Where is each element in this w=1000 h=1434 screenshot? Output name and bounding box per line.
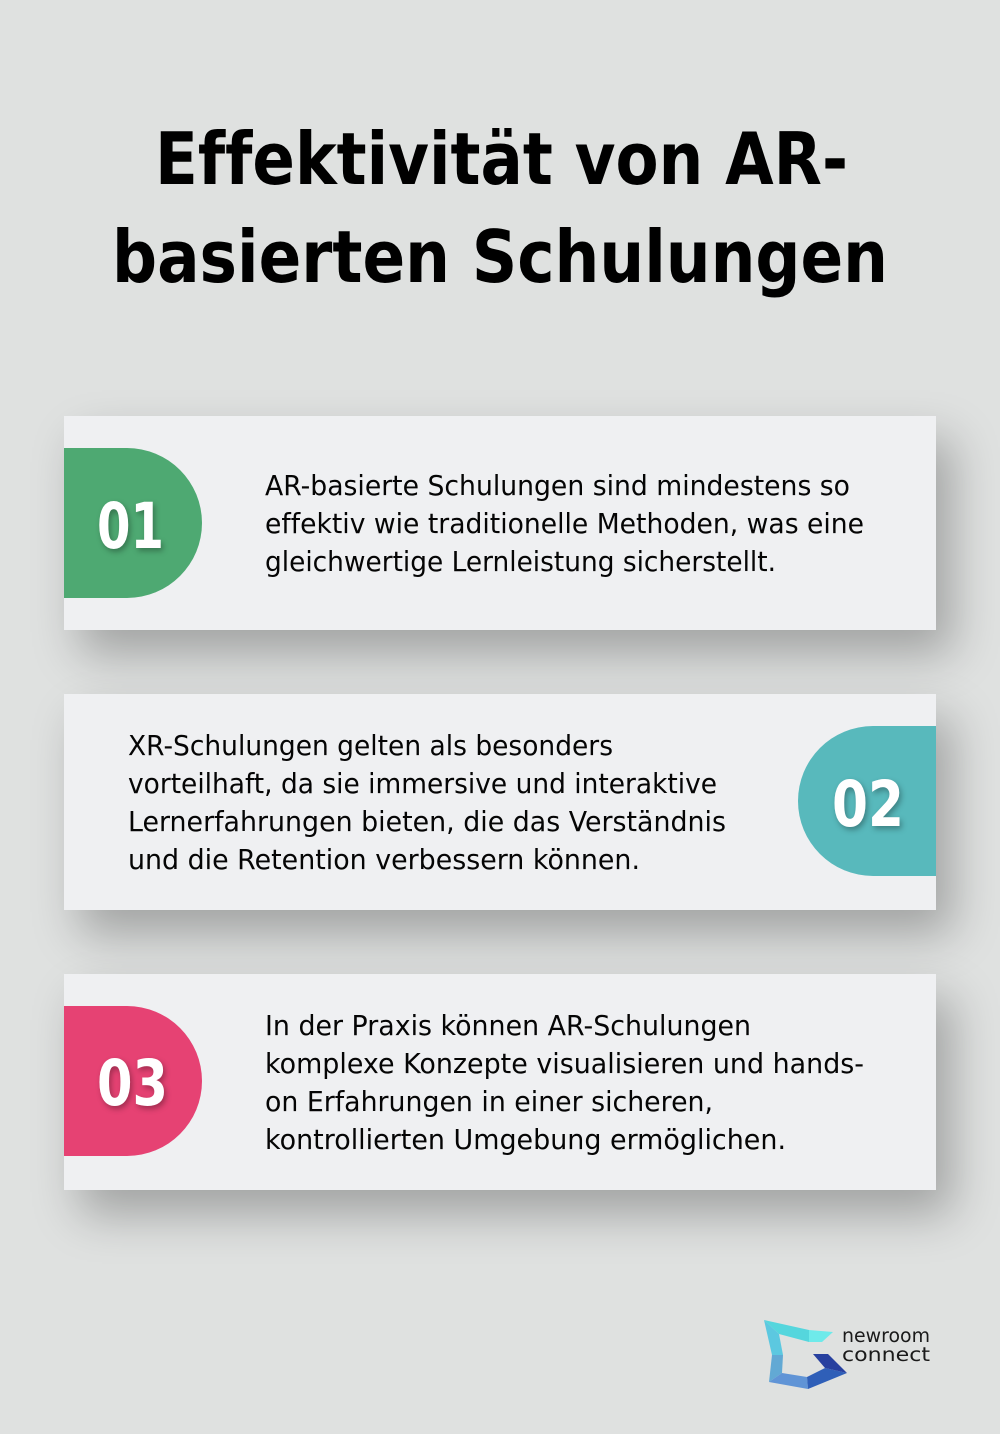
badge 03 [64, 1006, 202, 1156]
badge 03: 03 [97, 1047, 168, 1120]
text block 2: vorteilhaft, da sie immersive und interaktive [128, 768, 717, 800]
text block 1 [265, 470, 864, 578]
text block 3: In der Praxis können AR-Schulungen [265, 1010, 751, 1042]
text block 1: AR-basierte Schulungen sind mindestens so [265, 470, 850, 502]
text block 2: und die Retention verbessern können. [128, 844, 640, 876]
text block 1: gleichwertige Lernleistung sicherstellt. [265, 546, 776, 578]
logo: newroom connect: newroom [842, 1324, 930, 1347]
logo: newroom connect: connect [842, 1343, 930, 1366]
text block 3: komplexe Konzepte visualisieren und hands- [265, 1048, 864, 1080]
title: Effektivität von AR- [155, 117, 848, 201]
panel card 2 [64, 694, 936, 910]
icon: logo mark [764, 1320, 847, 1389]
badge 01: 01 [97, 490, 164, 563]
badge 02: 02 [832, 768, 904, 841]
text block 3: kontrollierten Umgebung ermöglichen. [265, 1124, 786, 1156]
text block 3 [265, 1010, 864, 1156]
text block 1: effektiv wie traditionelle Methoden, was eine [265, 508, 864, 540]
badge 01 [64, 448, 202, 598]
panel card 3 [64, 974, 936, 1190]
title: basierten Schulungen [112, 215, 888, 299]
title [112, 117, 888, 299]
logo: newroom connect [764, 1320, 930, 1389]
text block 2: Lernerfahrungen bieten, die das Verständnis [128, 806, 726, 838]
panel card 1 [64, 416, 936, 630]
text block 2: XR-Schulungen gelten als besonders [128, 730, 613, 762]
badge 02 [798, 726, 936, 876]
text block 2 [128, 730, 726, 876]
text block 3: on Erfahrungen in einer sicheren, [265, 1086, 713, 1118]
